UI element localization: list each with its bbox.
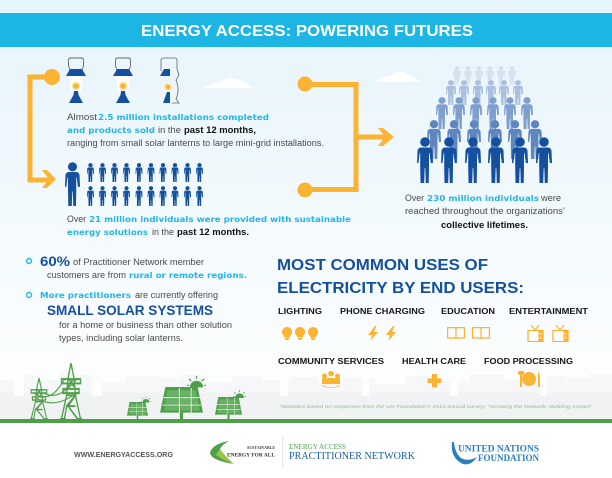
use: phone charging: [340, 307, 425, 341]
text: lifetime reach statistic: were: [540, 193, 561, 203]
use: food processing: FOOD PROCESSING: [484, 357, 573, 366]
text: small solar systems bullet: More practitioners: [40, 291, 131, 300]
logo: energy access practitioner network: [282, 436, 415, 468]
logo: energy access practitioner network: ENERGY ACCESS: [289, 443, 346, 451]
use: education: EDUCATION: [441, 307, 495, 316]
arrow: left bracket from lanterns to people: [30, 69, 60, 188]
text: lifetime reach statistic: [405, 193, 565, 230]
use: lighting: LIGHTING: [278, 307, 322, 316]
footer background: [0, 423, 612, 478]
text: small solar systems bullet: for a home or business than other solution: [59, 320, 232, 330]
text: lifetime reach statistic: Over: [405, 193, 424, 203]
text: lifetime reach statistic: reached throughout the organizations’: [405, 206, 565, 216]
text: installations statistic: and products sold: [67, 126, 155, 135]
heading: most common uses: ELECTRICITY BY END USERS:: [277, 280, 524, 297]
use: education: [441, 307, 495, 338]
icon: plate and cutlery: [518, 371, 540, 387]
icon: medical cross: [428, 374, 442, 388]
icon: lightning bolts: [368, 326, 396, 341]
icon: televisions: [528, 325, 568, 342]
use: community services: COMMUNITY SERVICES: [278, 357, 385, 366]
logo: united nations foundation: FOUNDATION: [478, 453, 539, 463]
text: small solar systems bullet: types, including solar lanterns.: [59, 333, 183, 343]
text: installations statistic: ranging from small solar lanterns to large mini-grid installations.: [67, 138, 324, 148]
text: 60 percent bullet: rural or remote regions.: [129, 271, 247, 280]
text: small solar systems bullet: [26, 290, 232, 343]
illustration: solar panels: [127, 376, 246, 419]
text: individuals statistic: 21 million individuals were provided with sustainable: [89, 215, 351, 224]
title: ENERGY ACCESS: POWERING FUTURES: [141, 23, 473, 40]
footnote: *Statistics based on responses from the UN Foundation’s 2014 annual survey: “Growing the Network; Building Impact”: [279, 404, 592, 410]
logo: energy access practitioner network: PRACTITIONER NETWORK: [289, 450, 415, 462]
logo: sustainable energy for all: SUSTAINABLE: [247, 445, 275, 450]
text: 60 percent bullet: [26, 254, 247, 280]
text: installations statistic: in the: [158, 125, 181, 135]
use: lighting: [278, 307, 322, 340]
icon: partial lantern: [160, 58, 179, 103]
logo: sustainable energy for all: [210, 441, 275, 464]
header banner: [0, 13, 612, 47]
logo: united nations foundation: [452, 442, 539, 464]
text: individuals statistic: Over: [67, 214, 86, 224]
text: lifetime reach statistic: 230 million individuals: [427, 194, 539, 203]
use: phone charging: PHONE CHARGING: [340, 307, 425, 316]
arrow: right bracket to crowd: [298, 76, 394, 198]
use: food processing: [484, 357, 573, 387]
heading: most common uses: MOST COMMON USES OF: [277, 257, 488, 274]
skyline silhouette: [0, 372, 612, 419]
icon: crowd of people: [417, 66, 552, 183]
text: individuals statistic: energy solutions: [67, 228, 148, 237]
text: installations statistic: past 12 months,: [184, 125, 256, 135]
text: installations statistic: 2.5 million installations completed: [98, 113, 269, 122]
clouds: [204, 72, 421, 88]
icon: one large person and twenty small people: [65, 162, 203, 206]
text: individuals statistic: past 12 months.: [177, 227, 249, 237]
text: lifetime reach statistic: collective lifetimes.: [441, 220, 528, 230]
icon: solar lanterns: [66, 58, 179, 103]
footer: website: WWW.ENERGYACCESS.ORG: [74, 452, 174, 459]
use: entertainment: [509, 307, 588, 342]
use: community services: [278, 357, 385, 388]
illustration: power towers: [30, 363, 82, 419]
green ground line: [0, 419, 612, 423]
icon: group of people: [322, 371, 340, 388]
text: 60 percent bullet: customers are from: [47, 270, 126, 280]
text: small solar systems bullet: SMALL SOLAR SYSTEMS: [47, 303, 213, 318]
text: installations statistic: Almost: [67, 112, 98, 122]
icon: books: [448, 328, 489, 338]
text: 60 percent bullet: of Practitioner Network member: [73, 257, 204, 267]
text: individuals statistic: in the: [152, 227, 174, 237]
heading: most common uses: [277, 257, 524, 297]
logo: united nations foundation: UNITED NATIONS: [458, 444, 539, 454]
use: health care: HEALTH CARE: [402, 357, 467, 366]
icon: bulbs: [282, 327, 318, 340]
text: installations statistic: [67, 112, 324, 148]
text: 60 percent bullet: 60%: [40, 254, 70, 269]
text: small solar systems bullet: are currently offering: [135, 290, 218, 300]
text: individuals statistic: [67, 214, 351, 237]
use: health care: [402, 357, 467, 388]
use: entertainment: ENTERTAINMENT: [509, 307, 588, 316]
logo: sustainable energy for all: ENERGY FOR ALL: [227, 452, 275, 458]
